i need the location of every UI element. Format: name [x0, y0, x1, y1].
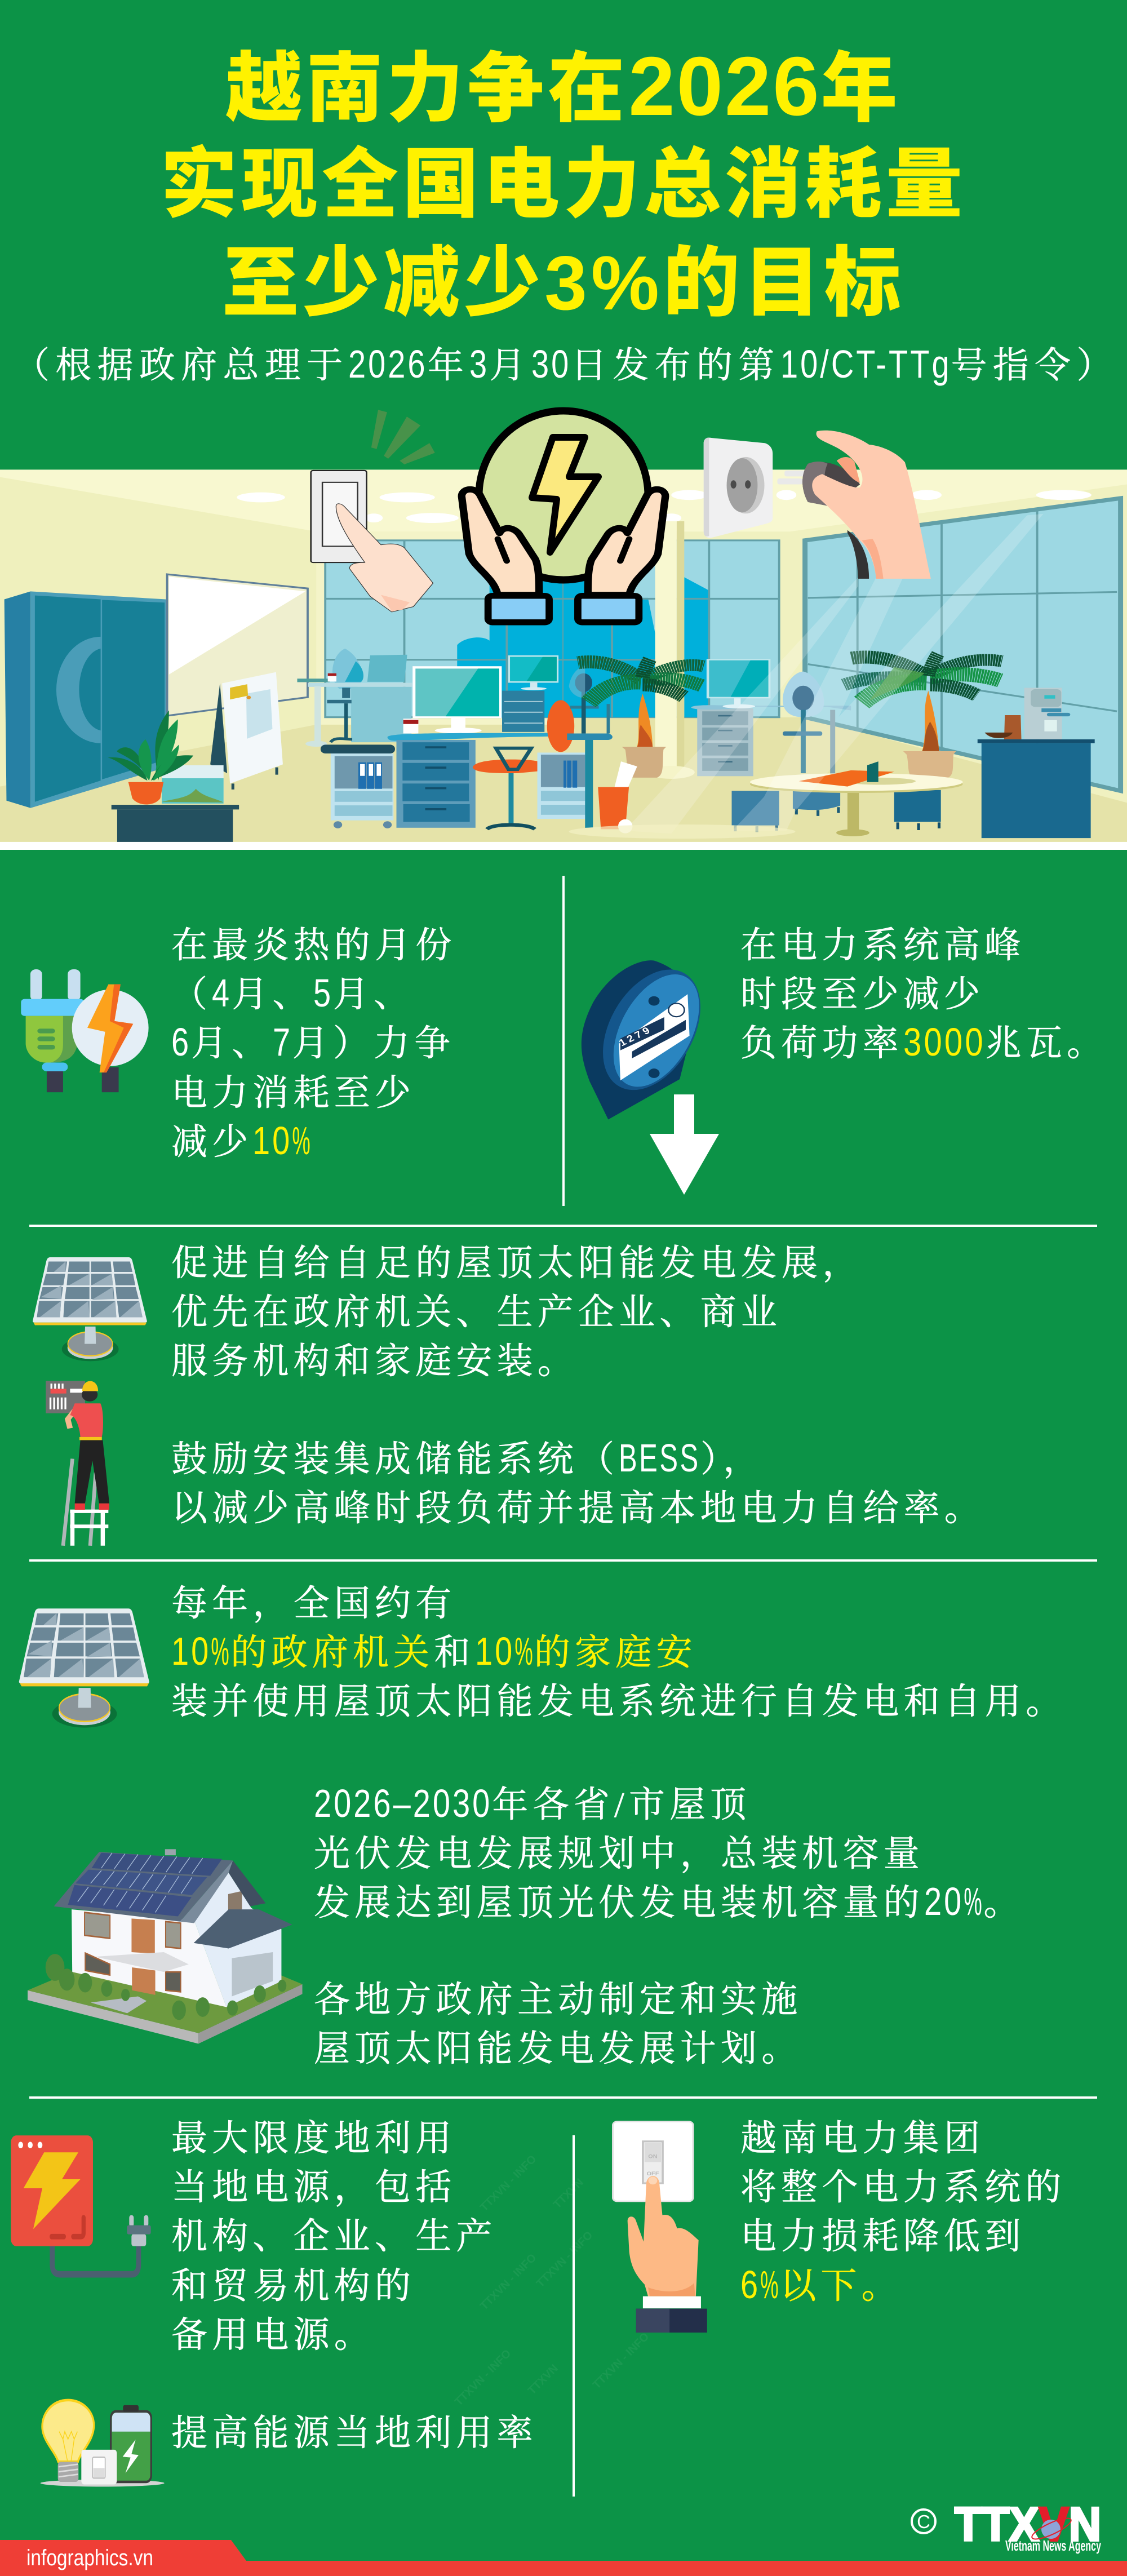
socket	[704, 438, 773, 538]
icon: electricity meter	[582, 957, 720, 1120]
text: 2026-2030 provincial plan: 光伏发电发展规划中，总装机容量	[314, 1834, 924, 1874]
title: 越南力争在2026年	[225, 40, 902, 133]
icon: finger pressing light switch	[613, 2122, 707, 2333]
text: rooftop solar development: 服务机构和家庭安装。	[171, 1341, 578, 1381]
text: yearly installation target: 装并使用屋顶太阳能发电系统进行自发电和自用。	[171, 1682, 1066, 1722]
energy circle	[479, 411, 648, 580]
low table	[112, 805, 239, 842]
icon: bulb, switch and battery	[41, 2400, 165, 2486]
round table with folder	[750, 761, 963, 836]
potted plant	[108, 711, 193, 804]
icon: plug and lightning bolt	[21, 969, 149, 1092]
text: rooftop solar development: 优先在政府机关、生产企业、商业	[171, 1292, 782, 1332]
text: hottest months target: 4	[212, 971, 232, 1015]
text: rooftop solar development: 促进自给自足的屋顶太阳能发电发展，	[171, 1243, 863, 1283]
palm tree 1	[578, 659, 704, 778]
filing cabinet with folders	[321, 744, 395, 828]
aquarium	[162, 765, 224, 804]
palm tree 2	[844, 654, 1002, 778]
stools	[731, 790, 941, 832]
illustration band: office scene	[0, 410, 1127, 843]
text: yearly installation target: 每年，全国约有	[171, 1584, 456, 1624]
whiteboard	[167, 574, 308, 716]
text: hottest months target: 月、 月）力争	[191, 1023, 455, 1063]
office room left half	[0, 469, 564, 843]
large monitor	[412, 666, 502, 733]
tissue bin	[598, 761, 637, 833]
text: 2026-2030 provincial plan: 2026–2030	[314, 1781, 492, 1825]
text: local government plans: 各地方政府主动制定和实施	[314, 1980, 802, 2020]
text: EVN loss reduction: 电力损耗降低到	[740, 2216, 1025, 2256]
main desk with drawers	[388, 719, 564, 828]
text: hottest months target: %	[292, 1119, 312, 1163]
orange office chair	[473, 700, 574, 829]
text: hottest months target	[171, 925, 456, 1163]
text: peak load reduction: 时段至少减少	[740, 974, 984, 1014]
text: yearly installation target: %	[211, 1629, 230, 1673]
watermark	[452, 2153, 651, 2409]
right hand	[578, 489, 665, 622]
text: backup power sources: 和贸易机构的	[171, 2266, 415, 2306]
text: battery storage: 鼓励安装集成储能系统（ ），	[171, 1439, 764, 1479]
text: battery storage: BESS	[619, 1436, 700, 1480]
sparks	[371, 410, 435, 464]
text: hottest months target: 电力消耗至少	[171, 1073, 415, 1113]
icon: worker on ladder at control panel	[46, 1381, 109, 1546]
text: 2026-2030 provincial plan: %	[964, 1879, 983, 1923]
watermark: TTXVN - INFO	[534, 2229, 595, 2290]
small desk with laptop	[297, 649, 412, 747]
title: 至少减少3%的目标	[222, 240, 905, 326]
title: 实现全国电力总消耗量	[161, 141, 966, 227]
text: yearly installation target: 10	[171, 1629, 211, 1673]
right side furniture	[564, 514, 1095, 839]
text: EVN loss reduction: 越南电力集团	[740, 2118, 984, 2158]
logo: TTXVN Vietnam News Agency: TTXVN	[955, 2498, 1101, 2551]
icon: finger pressing light switch: OFF	[647, 2171, 659, 2177]
watermark: TTXVN - INFO	[591, 2330, 651, 2392]
subtitle: source directive: （根据政府总理于 年 月 日发布的第 号指令）	[14, 345, 1119, 385]
second monitor and drawers	[502, 655, 558, 732]
icon: finger pressing light switch: ON	[648, 2154, 658, 2160]
text: local energy use: 提高能源当地利用率	[171, 2413, 538, 2453]
text: peak load reduction: 负荷功率 兆瓦。	[740, 1023, 1107, 1063]
text: EVN loss reduction: 以下。	[780, 2266, 902, 2306]
folders and desk post	[564, 666, 613, 828]
hand	[812, 431, 931, 579]
text: hottest months target: 减少	[171, 1122, 252, 1162]
icon: solar panel large	[19, 1608, 149, 1728]
icon: power bank with plug	[11, 2135, 151, 2274]
text: 2026-2030 provincial plan: 发展达到屋顶光伏发电装机容量的 。	[314, 1883, 1024, 1923]
blue cabinet	[978, 739, 1095, 838]
footer red bar with site address	[0, 2540, 1127, 2576]
wardrobe	[5, 591, 166, 808]
text: yearly installation target: 的政府机关和 的家庭安	[230, 1633, 697, 1673]
text: 2026-2030 provincial plan: 20	[924, 1879, 964, 1923]
text: rooftop solar development	[171, 1243, 863, 1381]
subtitle: source directive: 3	[469, 342, 490, 386]
icon: hands holding energy bulb	[462, 411, 665, 622]
text: backup power sources: 备用电源。	[171, 2315, 375, 2355]
coffee machine and cups on cabinet	[985, 688, 1070, 739]
text: EVN loss reduction: 6	[740, 2263, 760, 2307]
text: EVN loss reduction	[740, 2118, 1066, 2307]
icon: socket and hand with plug	[704, 431, 931, 579]
arrow: down	[650, 1094, 719, 1195]
fan-shaped chair	[783, 672, 835, 776]
icon: house with rooftop solar panels	[28, 1849, 303, 2044]
text: backup power sources	[171, 2118, 497, 2355]
whiteboard, wardrobe, easel, plant	[5, 574, 574, 842]
logo: TTXVN Vietnam News Agency: C	[917, 2511, 930, 2532]
text: EVN loss reduction: 将整个电力系统的	[740, 2167, 1066, 2207]
text: hottest months target: 7	[273, 1020, 292, 1064]
text: hottest months target: 10	[252, 1119, 292, 1163]
footer red bar with site address: infographics.vn	[26, 2546, 153, 2570]
subtitle: source directive: 30	[531, 342, 571, 386]
text: hottest months target: 5	[313, 971, 333, 1015]
watermark: TTXVN	[526, 2362, 561, 2397]
subtitle: source directive: 10/CT-TTg	[780, 342, 951, 386]
office room right half	[564, 469, 1127, 843]
text: yearly installation target	[171, 1584, 1066, 1722]
text: battery storage	[171, 1436, 985, 1528]
meter reading: 1279	[616, 1023, 654, 1048]
watermark: TTXVN - INFO	[478, 2251, 539, 2313]
text: local government plans: 屋顶太阳能发电发展计划。	[314, 2029, 802, 2069]
icon: solar panel small	[33, 1257, 147, 1361]
watermark: TTXVN	[551, 2176, 586, 2211]
text: 2026-2030 provincial plan	[314, 1781, 1024, 1923]
title	[161, 40, 966, 326]
text: EVN loss reduction: %	[760, 2263, 780, 2307]
meter reading	[616, 1017, 664, 1050]
plug	[777, 462, 869, 579]
text: hottest months target: 6	[171, 1020, 191, 1064]
text: hottest months target: 在最炎热的月份	[171, 925, 456, 965]
text: yearly installation target: %	[514, 1629, 534, 1673]
text: peak load reduction: 3000	[903, 1020, 986, 1064]
easel notice board	[210, 672, 283, 790]
text: backup power sources: 机构、企业、生产	[171, 2216, 497, 2256]
icon: wall switch with pointing hand	[311, 410, 435, 612]
text: backup power sources: 当地电源，包括	[171, 2167, 456, 2207]
watermark: TTXVN - INFO	[452, 2347, 513, 2409]
text: yearly installation target: 10	[475, 1629, 514, 1673]
text: hottest months target: （ 月、 月、	[171, 974, 414, 1014]
left hand	[462, 489, 549, 622]
rear monitor and drawers	[691, 659, 851, 776]
text: battery storage: 以减少高峰时段负荷并提高本地电力自给率。	[171, 1488, 985, 1528]
light beams through window	[624, 514, 1043, 833]
text: peak load reduction: 在电力系统高峰	[740, 925, 1025, 965]
text: 2026-2030 provincial plan: 年各省/市屋顶	[492, 1785, 751, 1825]
text: local government plans	[314, 1980, 802, 2069]
subtitle: source directive: 2026	[348, 342, 428, 386]
watermark: TTXVN - INFO	[478, 2153, 539, 2214]
lightning bolt	[532, 437, 598, 552]
text: peak load reduction	[740, 925, 1107, 1064]
text: backup power sources: 最大限度地利用	[171, 2118, 456, 2158]
